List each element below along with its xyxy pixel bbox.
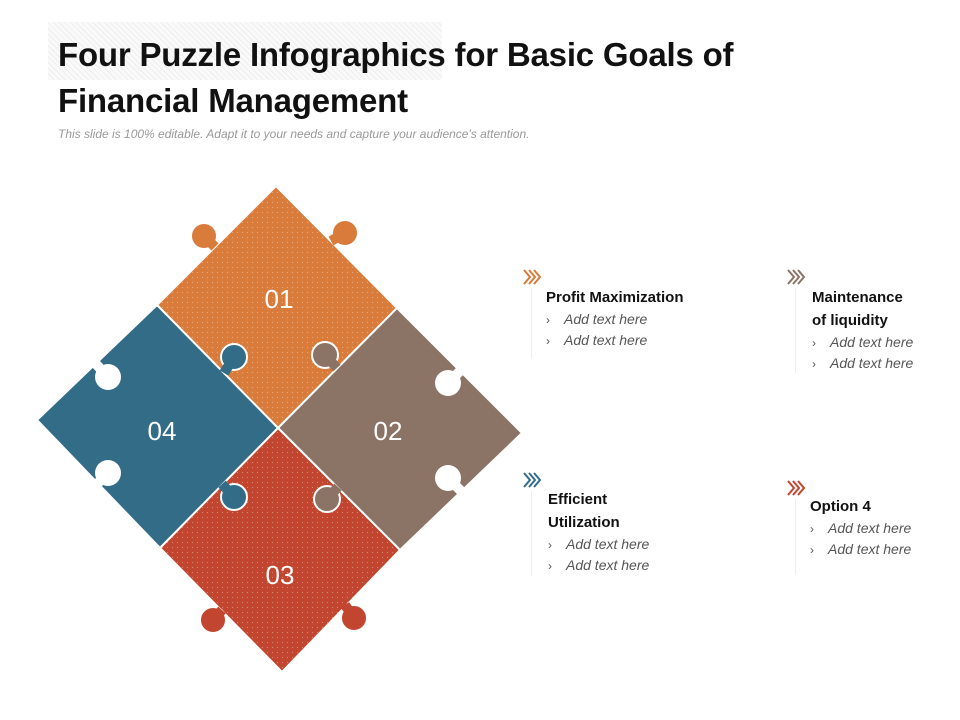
item 3: Efficient Utilization: Add text here [566, 557, 649, 573]
piece 01: 01 [265, 284, 293, 314]
item 1: Profit Maximization [523, 269, 684, 358]
icon: red chevrons [787, 480, 806, 496]
item 2: Maintenance of liquidity: › [812, 357, 816, 371]
piece 04: 04 [148, 416, 176, 446]
icon: brown chevrons [787, 269, 806, 285]
item 4: Option 4: Add text here [828, 541, 911, 557]
item 3: Efficient Utilization: Add text here [566, 536, 649, 552]
title [58, 36, 734, 119]
item 2: Maintenance of liquidity: Maintenance [812, 289, 903, 306]
piece 02 [278, 308, 522, 550]
item 3: Efficient Utilization [523, 472, 649, 576]
item 4: Option 4: Add text here [828, 520, 911, 536]
item 2: Maintenance of liquidity: Add text here [830, 355, 913, 371]
interlocking knobs [221, 342, 340, 512]
item 4: Option 4: Option 4 [810, 498, 871, 515]
item 1: Profit Maximization: › [546, 334, 550, 348]
subtitle: This slide is 100% editable. Adapt it to your needs and capture your audience's attention. [58, 127, 529, 141]
item 3: Efficient Utilization: › [548, 538, 552, 552]
item 3: Efficient Utilization: › [548, 559, 552, 573]
item 1: Profit Maximization: › [546, 313, 550, 327]
title background pattern [48, 22, 442, 80]
item 1: Profit Maximization: Add text here [564, 311, 647, 327]
item 2: Maintenance of liquidity: › [812, 336, 816, 350]
item 4: Option 4: › [810, 543, 814, 557]
piece 03 [160, 428, 400, 672]
piece 03: 03 [266, 560, 294, 590]
item 2: Maintenance of liquidity: of liquidity [812, 312, 888, 329]
item 3: Efficient Utilization: Utilization [548, 514, 620, 531]
item 4: Option 4: › [810, 522, 814, 536]
piece 02: 02 [374, 416, 402, 446]
item 2: Maintenance of liquidity [787, 269, 913, 373]
item 1: Profit Maximization: Profit Maximization [546, 289, 684, 306]
item 2: Maintenance of liquidity: Add text here [830, 334, 913, 350]
item 3: Efficient Utilization: Efficient [548, 491, 607, 508]
item 1: Profit Maximization: Add text here [564, 332, 647, 348]
icon: orange chevrons [523, 269, 542, 285]
piece 01 [157, 186, 397, 428]
piece 04 [37, 305, 278, 548]
item 4: Option 4 [787, 480, 911, 574]
title: Four Puzzle Infographics for Basic Goals of [58, 36, 733, 73]
icon: blue chevrons [523, 472, 542, 488]
title: Financial Management [58, 82, 408, 119]
